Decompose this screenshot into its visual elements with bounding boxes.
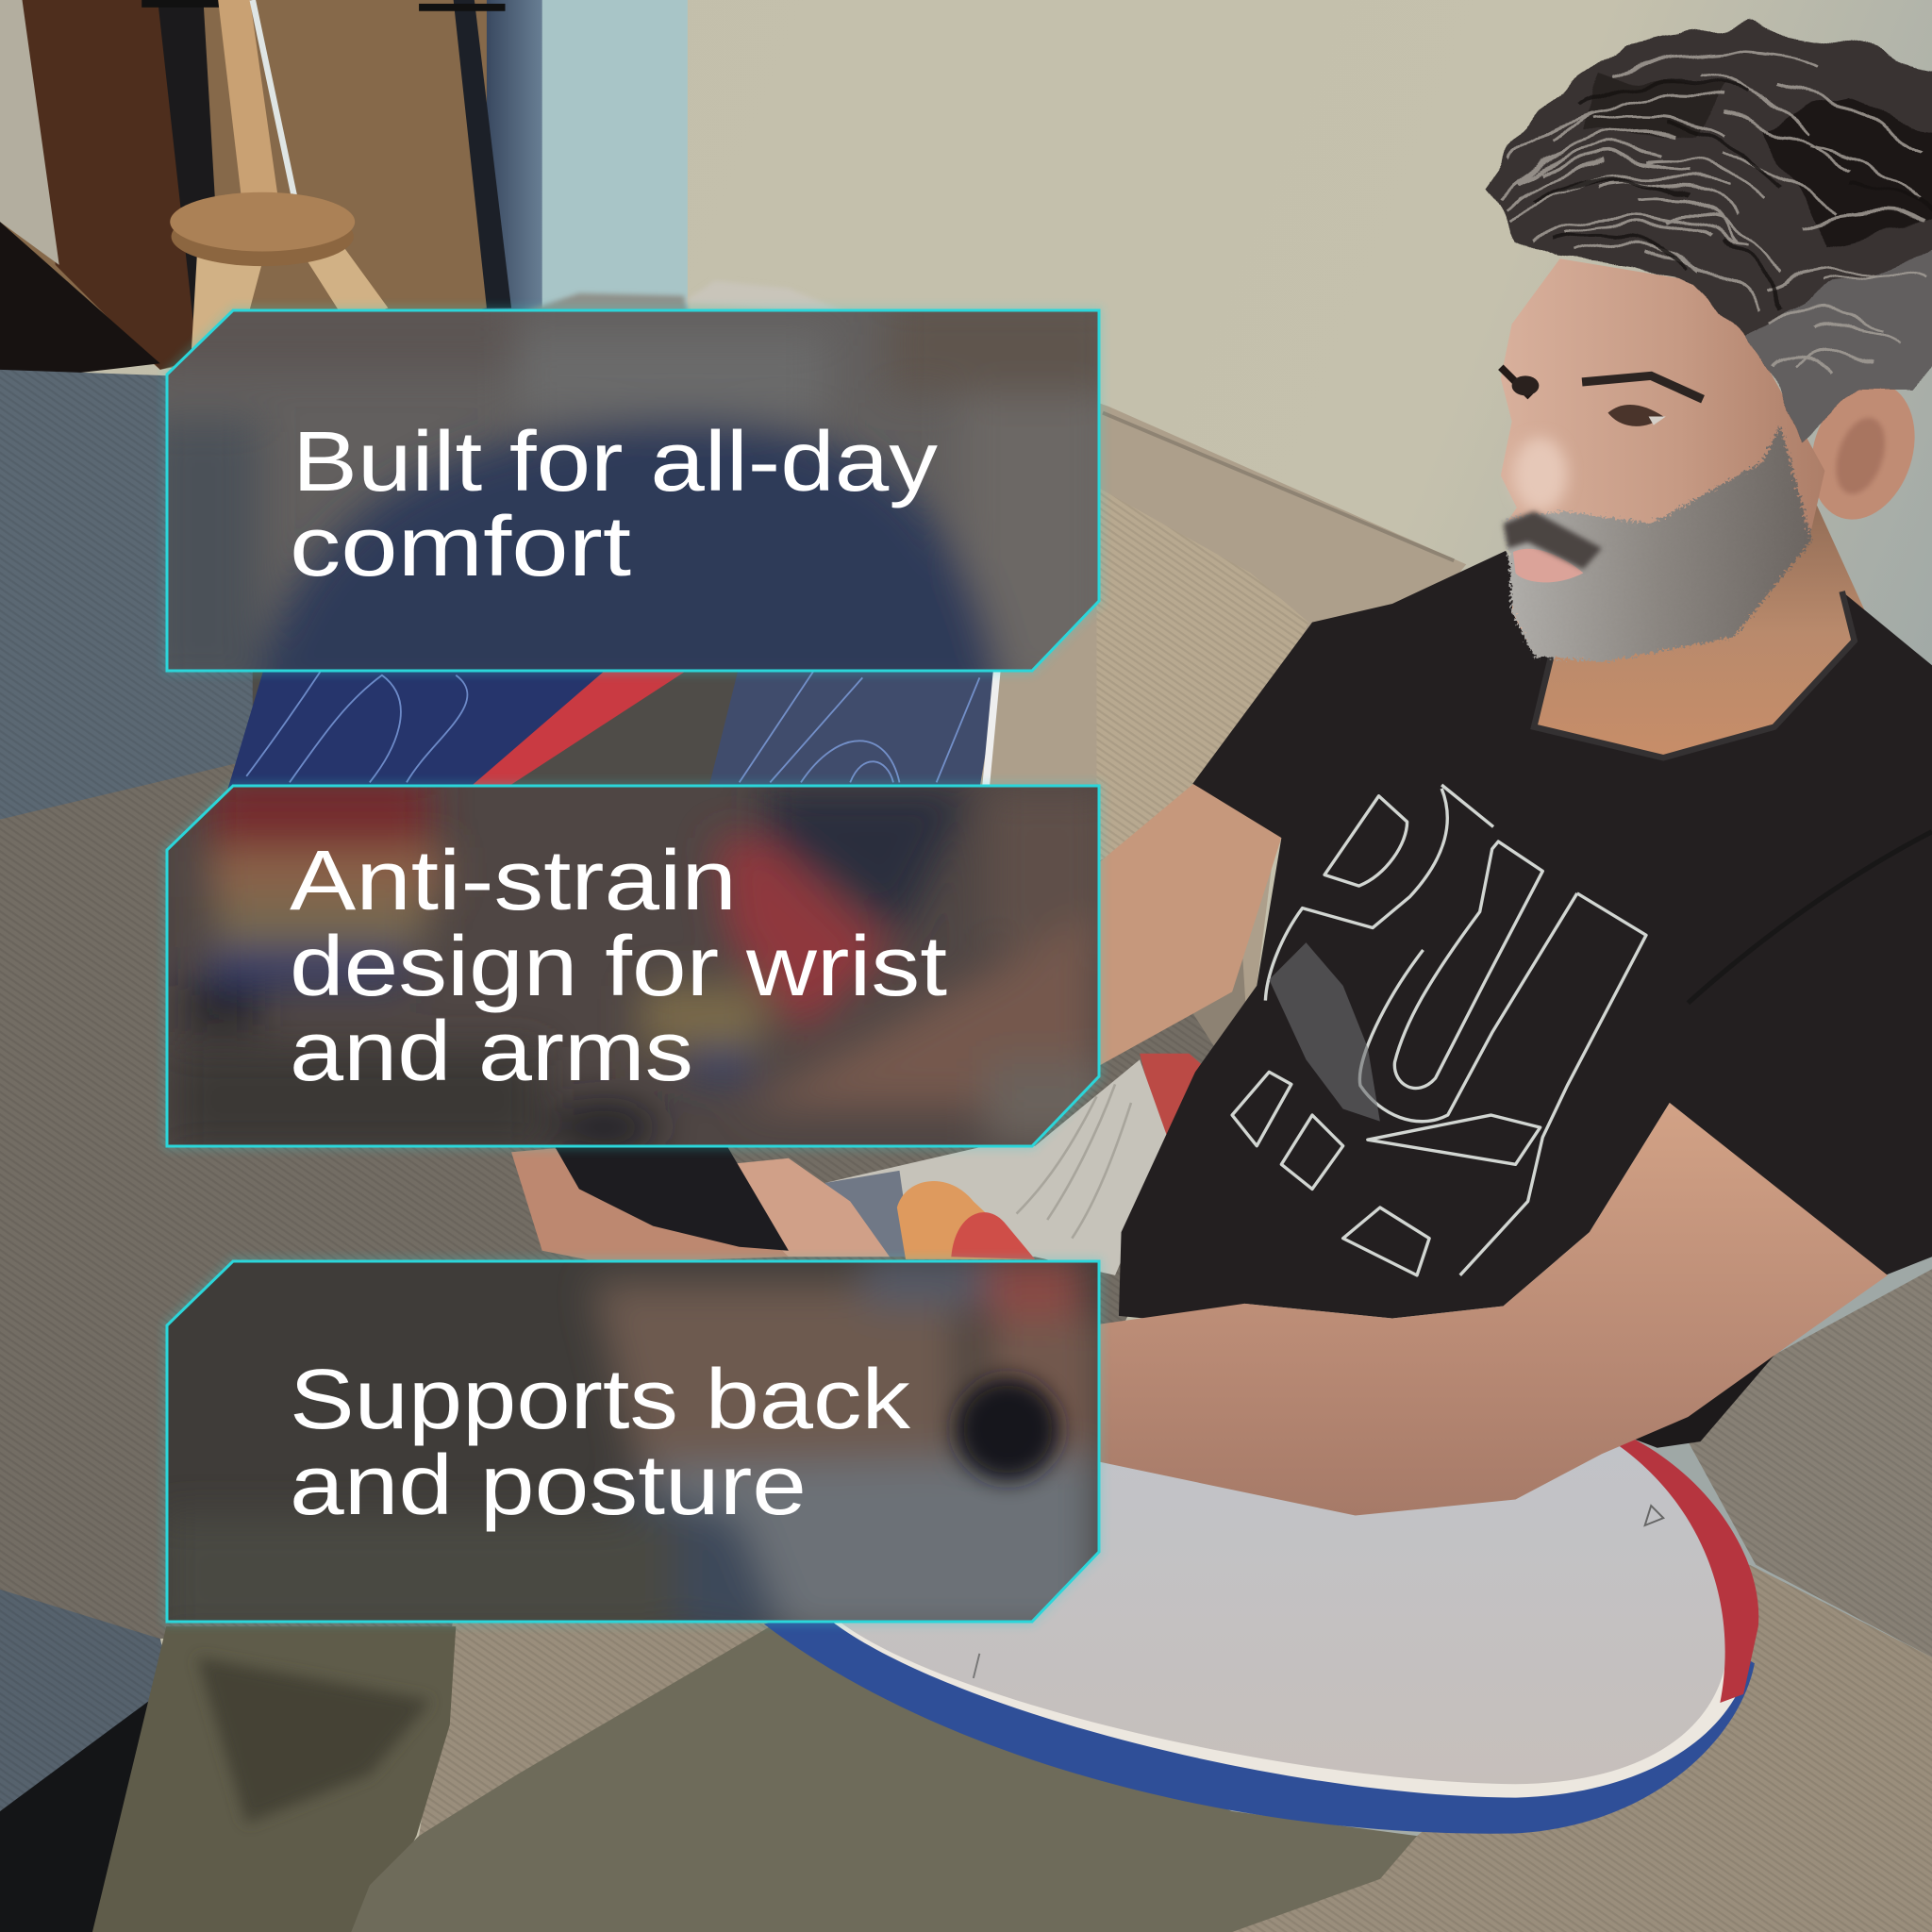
moustache: [1503, 511, 1602, 569]
mouth: [1513, 549, 1583, 582]
panel blurred backdrop: [168, 311, 1098, 670]
panel glow: [167, 786, 1099, 1146]
panel text: Anti-strain: [290, 834, 737, 928]
pillow section between panels: [228, 665, 1001, 789]
panel outline: [167, 310, 1099, 671]
far arm: [1099, 782, 1281, 1066]
panel glow: [167, 310, 1099, 671]
face: [1501, 258, 1824, 659]
panel text: Supports back: [290, 1353, 911, 1447]
panel: all-day comfort: [160, 303, 1107, 679]
facial highlights: [1513, 438, 1567, 511]
gaming pillow: [764, 1054, 1758, 1834]
shirt tail: [1607, 1356, 1774, 1448]
eyes and brows: [1501, 367, 1703, 426]
panel text: and posture: [290, 1439, 807, 1533]
panel blurred backdrop: [160, 776, 1109, 1156]
t-shirt: [1119, 551, 1932, 1321]
beard: [1506, 425, 1811, 661]
panel outline: [167, 786, 1099, 1146]
panel glow: [167, 1261, 1099, 1622]
panel: anti-strain design: [160, 776, 1109, 1156]
shirt collar: [1534, 591, 1855, 758]
neck: [1518, 492, 1873, 774]
ear: [1794, 369, 1932, 533]
panel blurred backdrop: [160, 1255, 1104, 1639]
trousers: [92, 1626, 1417, 1932]
panel text: comfort: [290, 500, 631, 594]
panel text: and arms: [290, 1005, 693, 1099]
blurred blanket behind panels: [518, 281, 850, 321]
shirt sleeve seam: [1688, 832, 1932, 1003]
shirt print animal: [1269, 942, 1380, 1122]
near arm: [1096, 1103, 1888, 1516]
panel text: design for wrist: [290, 920, 947, 1014]
panel text: Built for all-day: [292, 415, 938, 509]
panel outline: [167, 1261, 1099, 1622]
hands and controller: [511, 1146, 890, 1263]
hair: [1485, 25, 1932, 443]
panel: back and posture: [160, 1255, 1104, 1639]
shirt print outline: [1232, 785, 1646, 1275]
room corner and shelving: [0, 0, 688, 382]
